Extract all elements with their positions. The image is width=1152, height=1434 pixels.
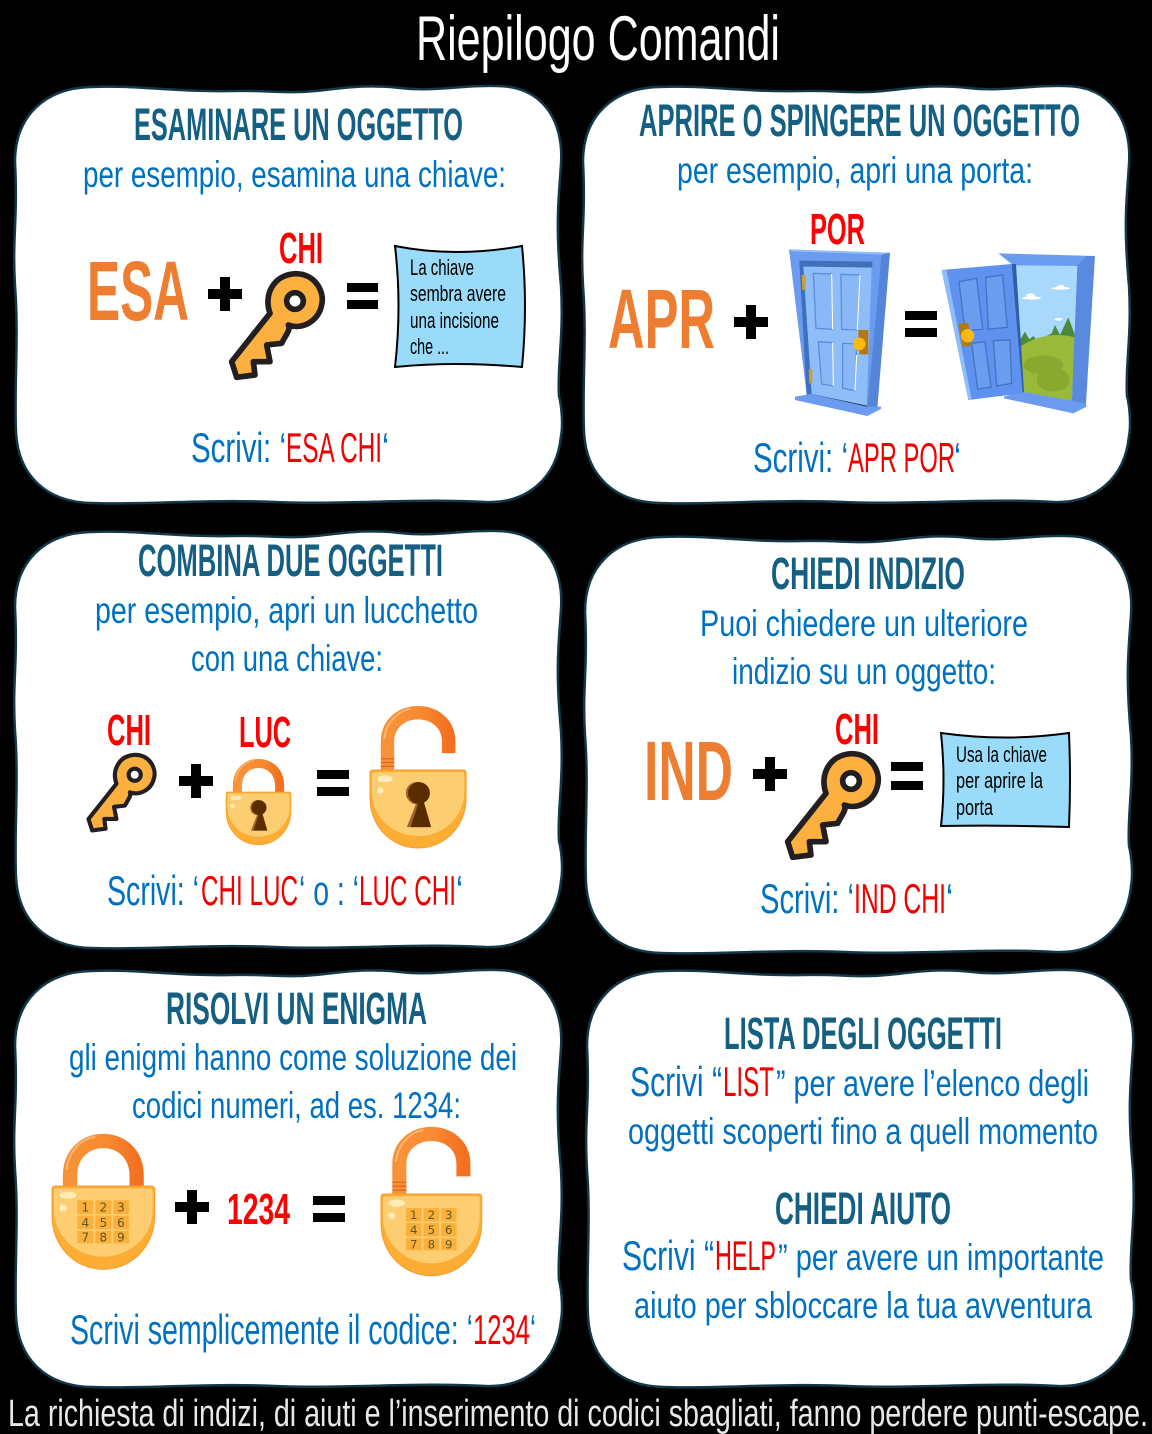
instruction: ‘ [954, 434, 961, 481]
instruction: Scrivi semplicemente il codice: ‘ [70, 1306, 473, 1353]
icon: closed padlock [226, 761, 291, 845]
icon: open combination padlock: 3 [445, 1208, 452, 1222]
icon: key [232, 274, 322, 377]
subtitle: per esempio, esamina una chiave: [83, 154, 506, 195]
icon: closed combination padlock: 3 [117, 1201, 125, 1215]
note: hint: porta [956, 795, 994, 820]
note: key description: sembra avere [410, 281, 506, 306]
instruction: LUC CHI [359, 867, 456, 914]
text: list command: Scrivi “ [630, 1058, 722, 1105]
text: list command: LIST [723, 1058, 774, 1105]
plus sign [734, 305, 768, 339]
instruction [107, 867, 463, 914]
label POR: POR [810, 205, 865, 254]
heading: CHIEDI INDIZIO [771, 548, 965, 599]
icon: open combination padlock: 5 [428, 1223, 435, 1237]
subtitle: con una chiave: [191, 638, 383, 679]
text: help command: Scrivi “ [622, 1232, 714, 1279]
icon: closed combination padlock: 6 [117, 1216, 125, 1230]
plus sign [208, 277, 242, 311]
panel background [14, 970, 562, 1387]
heading: COMBINA DUE OGGETTI [138, 535, 443, 586]
instruction: ‘ [530, 1306, 536, 1353]
text: list command [628, 1058, 1098, 1152]
text: help command: HELP [715, 1232, 776, 1279]
label LUC: LUC [239, 708, 291, 757]
icon: key [788, 754, 878, 857]
icon: closed combination padlock: 4 [82, 1216, 89, 1230]
panel: aprire o spingere un oggetto [582, 86, 1130, 503]
subtitle: per esempio, apri un lucchetto [95, 590, 478, 631]
panel background [14, 86, 562, 503]
icon: open padlock [370, 709, 466, 848]
panel background [14, 531, 562, 948]
equals sign [891, 762, 923, 790]
icon: closed combination padlock: 2 [100, 1201, 107, 1215]
subtitle: gli enigmi hanno come soluzione dei [69, 1037, 517, 1078]
icon: open combination padlock: 8 [428, 1238, 435, 1252]
note: hint [941, 733, 1070, 827]
instruction: ‘ [946, 875, 953, 922]
subtitle [700, 603, 1028, 692]
equals sign [905, 311, 937, 337]
plus sign [175, 1190, 209, 1224]
icon: closed combination padlock: 8 [100, 1231, 107, 1245]
icon: closed combination padlock: 1 [82, 1201, 89, 1215]
icon: open combination padlock: 1 [410, 1208, 417, 1222]
note: hint: per aprire la [956, 768, 1044, 793]
label CHI: CHI [279, 224, 323, 273]
equals sign [313, 1196, 345, 1222]
icon: open combination padlock: 6 [445, 1223, 452, 1237]
text: help command [622, 1232, 1104, 1326]
instruction: APR POR [848, 434, 955, 481]
instruction: ‘ o : ‘ [299, 867, 359, 914]
icon: closed combination padlock: 7 [82, 1231, 89, 1245]
icon: open door [942, 253, 1095, 413]
label CHI: CHI [107, 706, 151, 755]
plus sign [179, 764, 213, 798]
instruction: Scrivi: ‘ [107, 867, 199, 914]
note: key description: La chiave [410, 255, 474, 280]
icon: open combination padlock: 7 [410, 1238, 417, 1252]
code 1234: 1234 [227, 1185, 290, 1234]
note: key description: una incisione [410, 308, 499, 333]
icon: closed door [789, 249, 890, 416]
instruction [753, 434, 961, 481]
label CHI: CHI [835, 705, 879, 754]
panel background [584, 536, 1132, 953]
heading: RISOLVI UN ENIGMA [166, 983, 427, 1034]
instruction [191, 424, 389, 471]
panel: combina due oggetti [14, 531, 562, 948]
panel background [582, 86, 1130, 503]
command ESA: ESA [87, 244, 189, 338]
instruction: 1234 [473, 1306, 530, 1353]
note: key description [395, 246, 525, 367]
instruction: CHI LUC [201, 867, 298, 914]
icon: key [89, 755, 155, 830]
equals sign [317, 770, 349, 796]
plus sign [753, 757, 787, 791]
title: Riepilogo Comandi [416, 4, 780, 74]
panel: esaminare un oggetto [14, 86, 562, 503]
heading: ESAMINARE UN OGGETTO [134, 99, 463, 150]
instruction: ‘ [456, 867, 463, 914]
note: key description: che ... [410, 334, 449, 359]
subtitle: Puoi chiedere un ulteriore [700, 603, 1028, 644]
panel: lista degli oggetti e chiedi aiuto [586, 970, 1134, 1387]
panel background [586, 970, 1134, 1387]
panel: risolvi un enigma [14, 970, 562, 1387]
subtitle: codici numeri, ad es. 1234: [132, 1085, 461, 1126]
icon: closed combination padlock: 9 [117, 1231, 125, 1245]
instruction: Scrivi: ‘ [753, 434, 848, 481]
subtitle: per esempio, apri una porta: [677, 150, 1033, 191]
panel: chiedi indizio [584, 536, 1132, 953]
icon: open combination padlock: 2 [428, 1208, 435, 1222]
icon: closed combination padlock: 5 [100, 1216, 107, 1230]
instruction: Scrivi: ‘ [191, 424, 286, 471]
icon: closed combination padlock [52, 1137, 155, 1269]
note: hint: Usa la chiave [956, 742, 1047, 767]
instruction: ESA CHI [286, 424, 382, 471]
equals sign [347, 283, 378, 309]
command APR: APR [608, 272, 715, 366]
icon: open combination padlock: 4 [410, 1223, 417, 1237]
instruction: ‘ [382, 424, 389, 471]
heading: chiedi aiuto: CHIEDI AIUTO [775, 1183, 951, 1234]
subtitle [95, 590, 478, 679]
instruction: Scrivi: ‘ [760, 875, 854, 922]
icon: open combination padlock: 9 [445, 1238, 452, 1252]
subtitle: indizio su un oggetto: [732, 651, 996, 692]
instruction: IND CHI [854, 875, 946, 922]
icon: open combination padlock [381, 1130, 482, 1276]
command IND: IND [644, 724, 733, 818]
subtitle [69, 1037, 517, 1126]
